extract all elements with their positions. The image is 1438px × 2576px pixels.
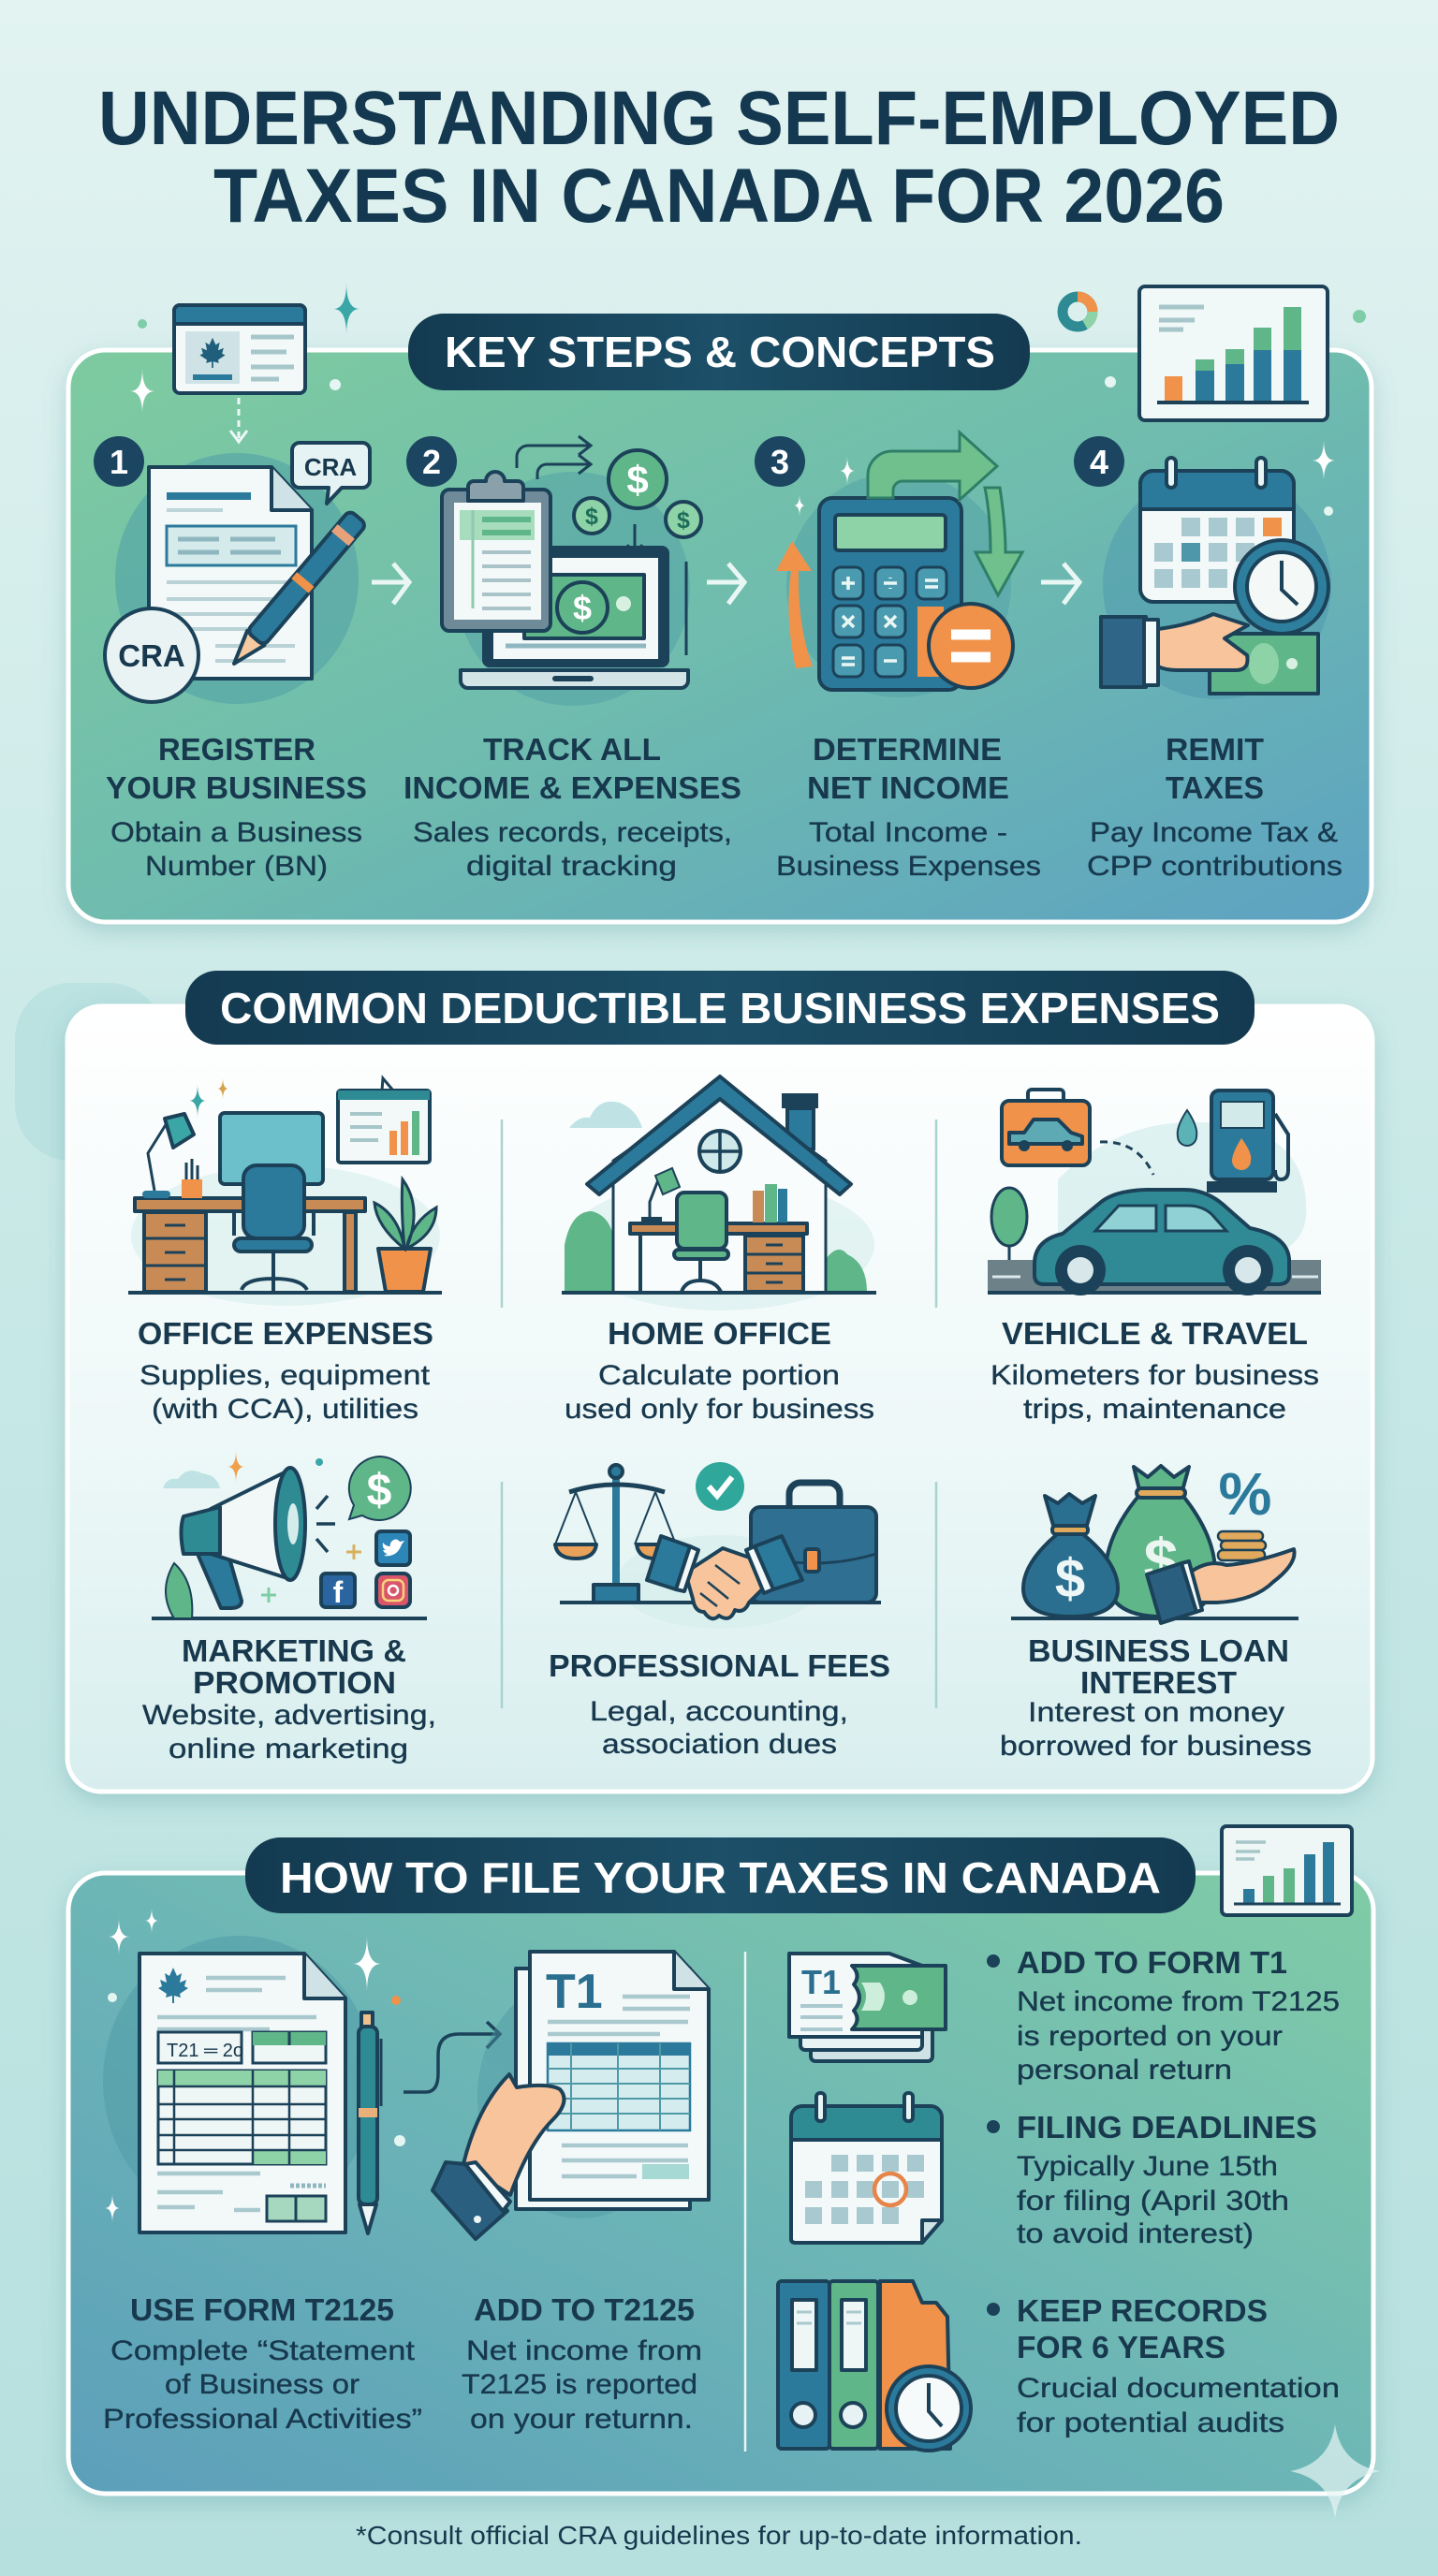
- heading: key steps and concepts: [408, 314, 1030, 390]
- heading: key steps and concepts: KEY STEPS & CONCEPTS: [445, 328, 995, 376]
- step 1 text: Number (BN): [145, 851, 328, 882]
- panel: how to file your taxes in canada: [68, 1826, 1373, 2494]
- icon: registration form with CRA seal and pen: CRA: [118, 638, 185, 673]
- title: [98, 76, 1340, 239]
- step 3 text: DETERMINE: [813, 732, 1002, 767]
- step 4 text: TAXES: [1166, 770, 1264, 805]
- decorative sparkles and dots, top: [130, 283, 1366, 414]
- step 4 number badge: [1074, 436, 1124, 487]
- icon: calendar with deadline marker: [791, 2093, 942, 2243]
- text: vehicle and travel: [990, 1316, 1319, 1425]
- arrow: dashed from browser to step 1: [230, 398, 247, 442]
- icon: clipboard, laptop and coins: $: [677, 507, 690, 534]
- text: marketing and promotion: Website, advertising,: [142, 1700, 436, 1731]
- arrow: step 1 to 2: [372, 564, 409, 604]
- step 2 text: [404, 732, 741, 882]
- text: office expenses: (with CCA), utilities: [152, 1394, 418, 1425]
- icon: clipboard, laptop and coins: $: [573, 589, 592, 627]
- text: professional fees: PROFESSIONAL FEES: [549, 1648, 890, 1683]
- icon: office desk: [128, 1077, 442, 1306]
- step 3 text: NET INCOME: [807, 770, 1009, 805]
- icon: money bags and coins: [1011, 1460, 1299, 1623]
- icon: money bags and coins: %: [1219, 1460, 1271, 1528]
- step 1 number badge: [94, 436, 144, 487]
- icon: mini bar chart card: [1222, 1826, 1352, 1915]
- text: add to T2125: Net income from: [466, 2335, 702, 2366]
- text: home office: Calculate portion: [598, 1360, 840, 1391]
- text: professional fees: Legal, accounting,: [590, 1696, 848, 1727]
- icon: scales, handshake and briefcase: [555, 1462, 881, 1629]
- text: use form T2125: of Business or: [165, 2369, 360, 2400]
- icon: binders and clock: [778, 2281, 971, 2451]
- step 4 text: Pay Income Tax &: [1090, 817, 1338, 848]
- text: add to form T1: ADD TO FORM T1: [1017, 1945, 1287, 1980]
- icon: megaphone and social media: $: [367, 1466, 392, 1515]
- icon: clipboard, laptop and coins: [442, 436, 701, 706]
- text: keep records for 6 years: FOR 6 YEARS: [1017, 2330, 1225, 2364]
- step 1 number badge: 1: [110, 443, 128, 481]
- step 3 text: [776, 732, 1041, 882]
- text: use form T2125: USE FORM T2125: [130, 2292, 394, 2327]
- step 2 number badge: [406, 436, 457, 487]
- step 4 text: [1087, 732, 1343, 882]
- icon: T1 papers and banknote: [789, 1954, 946, 2061]
- step 3 number badge: 3: [770, 443, 789, 481]
- text: business loan interest: borrowed for business: [1000, 1731, 1312, 1762]
- panel: key steps and concepts: [68, 283, 1372, 922]
- step 1 text: YOUR BUSINESS: [106, 770, 367, 805]
- text: office expenses: OFFICE EXPENSES: [138, 1316, 433, 1351]
- decorative background blob: [15, 983, 165, 1161]
- text: marketing and promotion: PROMOTION: [193, 1665, 396, 1700]
- text: add to T2125: [462, 2292, 702, 2435]
- text: marketing and promotion: [142, 1633, 436, 1764]
- text: add to form T1: [987, 1945, 1340, 2086]
- step 1 text: [106, 732, 367, 882]
- heading: how to file your taxes in canada: [245, 1837, 1196, 1913]
- text: professional fees: association dues: [602, 1729, 837, 1760]
- text: add to form T1: personal return: [1017, 2055, 1232, 2086]
- step 2 text: Sales records, receipts,: [413, 817, 732, 848]
- icon: money bags and coins: $: [1144, 1526, 1178, 1595]
- text: business loan interest: BUSINESS LOAN: [1028, 1633, 1289, 1668]
- icon: registration form with CRA seal and pen: [105, 443, 370, 704]
- text: vehicle and travel: Kilometers for business: [990, 1360, 1319, 1391]
- title: TAXES IN CANADA FOR 2026: [213, 154, 1225, 239]
- step 2 number badge: 2: [422, 443, 441, 481]
- step 2 text: digital tracking: [466, 851, 677, 882]
- step 3 text: Total Income -: [809, 817, 1007, 848]
- text: add to form T1: is reported on your: [1017, 2021, 1283, 2052]
- heading: common deductible business expenses: COMMON DEDUCTIBLE BUSINESS EXPENSES: [220, 984, 1220, 1032]
- text: use form T2125: Professional Activities”: [103, 2404, 422, 2435]
- icon: registration form with CRA seal and pen: CRA: [304, 453, 357, 481]
- icon: megaphone and social media: f: [333, 1575, 344, 1609]
- text: home office: [565, 1316, 874, 1425]
- text: professional fees: [549, 1648, 890, 1760]
- text: use form T2125: [103, 2292, 422, 2435]
- step 1 text: REGISTER: [158, 732, 315, 767]
- text: keep records for 6 years: KEEP RECORDS: [1017, 2293, 1268, 2328]
- text: add to T2125: T2125 is reported: [462, 2369, 697, 2400]
- step 4 text: REMIT: [1166, 732, 1264, 767]
- text: marketing and promotion: MARKETING &: [182, 1633, 406, 1668]
- text: business loan interest: INTEREST: [1080, 1665, 1237, 1700]
- panel: common deductible business expenses: [67, 971, 1372, 1792]
- step 4 number badge: 4: [1090, 443, 1108, 481]
- text: vehicle and travel: trips, maintenance: [1023, 1394, 1286, 1425]
- icon: home office: [562, 1076, 876, 1310]
- icon: donut chart: [1063, 297, 1093, 327]
- text: keep records for 6 years: for potential audits: [1017, 2408, 1284, 2438]
- icon: clipboard, laptop and coins: $: [585, 504, 598, 530]
- icon: T2125 form with pen: T21 ═ 2o: [167, 2041, 243, 2061]
- text: use form T2125: Complete “Statement: [110, 2335, 416, 2366]
- text: add to T2125: ADD TO T2125: [474, 2292, 695, 2327]
- arrow: step 3 to 4: [1041, 564, 1079, 604]
- step 2 text: TRACK ALL: [483, 732, 661, 767]
- icon: clipboard, laptop and coins: $: [626, 458, 649, 502]
- text: filing deadlines: FILING DEADLINES: [1017, 2110, 1317, 2144]
- text: vehicle and travel: VEHICLE & TRAVEL: [1002, 1316, 1308, 1351]
- text: office expenses: [138, 1316, 433, 1425]
- arrow: T2125 to T1: [404, 2022, 500, 2092]
- text: business loan interest: Interest on money: [1028, 1697, 1284, 1728]
- text: office expenses: Supplies, equipment: [139, 1360, 431, 1391]
- step 2 text: INCOME & EXPENSES: [404, 770, 741, 805]
- icon: T1 form held by hand: T1: [546, 1965, 603, 2019]
- text: home office: HOME OFFICE: [608, 1316, 831, 1351]
- icon: vehicle and fuel: [988, 1090, 1321, 1295]
- text: add to T2125: on your returnn.: [470, 2404, 693, 2435]
- icon: bar chart card: [1139, 286, 1328, 420]
- heading: how to file your taxes in canada: HOW TO FILE YOUR TAXES IN CANADA: [280, 1853, 1161, 1902]
- arrow: step 2 to 3: [707, 564, 744, 604]
- heading: common deductible business expenses: [185, 971, 1255, 1045]
- step 4 text: CPP contributions: [1087, 851, 1343, 882]
- text: keep records for 6 years: [987, 2293, 1340, 2438]
- icon: T2125 form with pen: [103, 1936, 381, 2233]
- text: marketing and promotion: online marketing: [169, 1734, 408, 1764]
- icon: megaphone and social media: [152, 1451, 427, 1618]
- text: home office: used only for business: [565, 1394, 874, 1425]
- decorative large sparkle: [1290, 2424, 1380, 2518]
- text: business loan interest: [1000, 1633, 1312, 1762]
- step 3 text: Business Expenses: [776, 851, 1041, 882]
- title: UNDERSTANDING SELF-EMPLOYED: [98, 76, 1340, 161]
- text: add to form T1: Net income from T2125: [1017, 1986, 1340, 2017]
- footer note: *Consult official CRA guidelines for up-to-date information.: [356, 2521, 1082, 2550]
- text: keep records for 6 years: Crucial documentation: [1017, 2373, 1340, 2404]
- decorative sparkles, filing panel: [105, 1908, 405, 2223]
- icon: calendar, clock and hand with money: [1101, 440, 1335, 699]
- text: filing deadlines: to avoid interest): [1017, 2218, 1254, 2249]
- text: filing deadlines: for filing (April 30th: [1017, 2186, 1289, 2217]
- icon: T1 form held by hand: [433, 1952, 709, 2239]
- text: filing deadlines: [987, 2110, 1317, 2249]
- text: filing deadlines: Typically June 15th: [1017, 2151, 1278, 2182]
- step 1 text: Obtain a Business: [110, 817, 362, 848]
- icon: money bags and coins: $: [1055, 1548, 1085, 1609]
- step 3 number badge: [755, 436, 805, 487]
- icon: calculator with arrows: [776, 432, 1022, 697]
- icon: browser window with maple leaf: [174, 305, 305, 393]
- icon: T1 papers and banknote: T1: [801, 1963, 841, 2001]
